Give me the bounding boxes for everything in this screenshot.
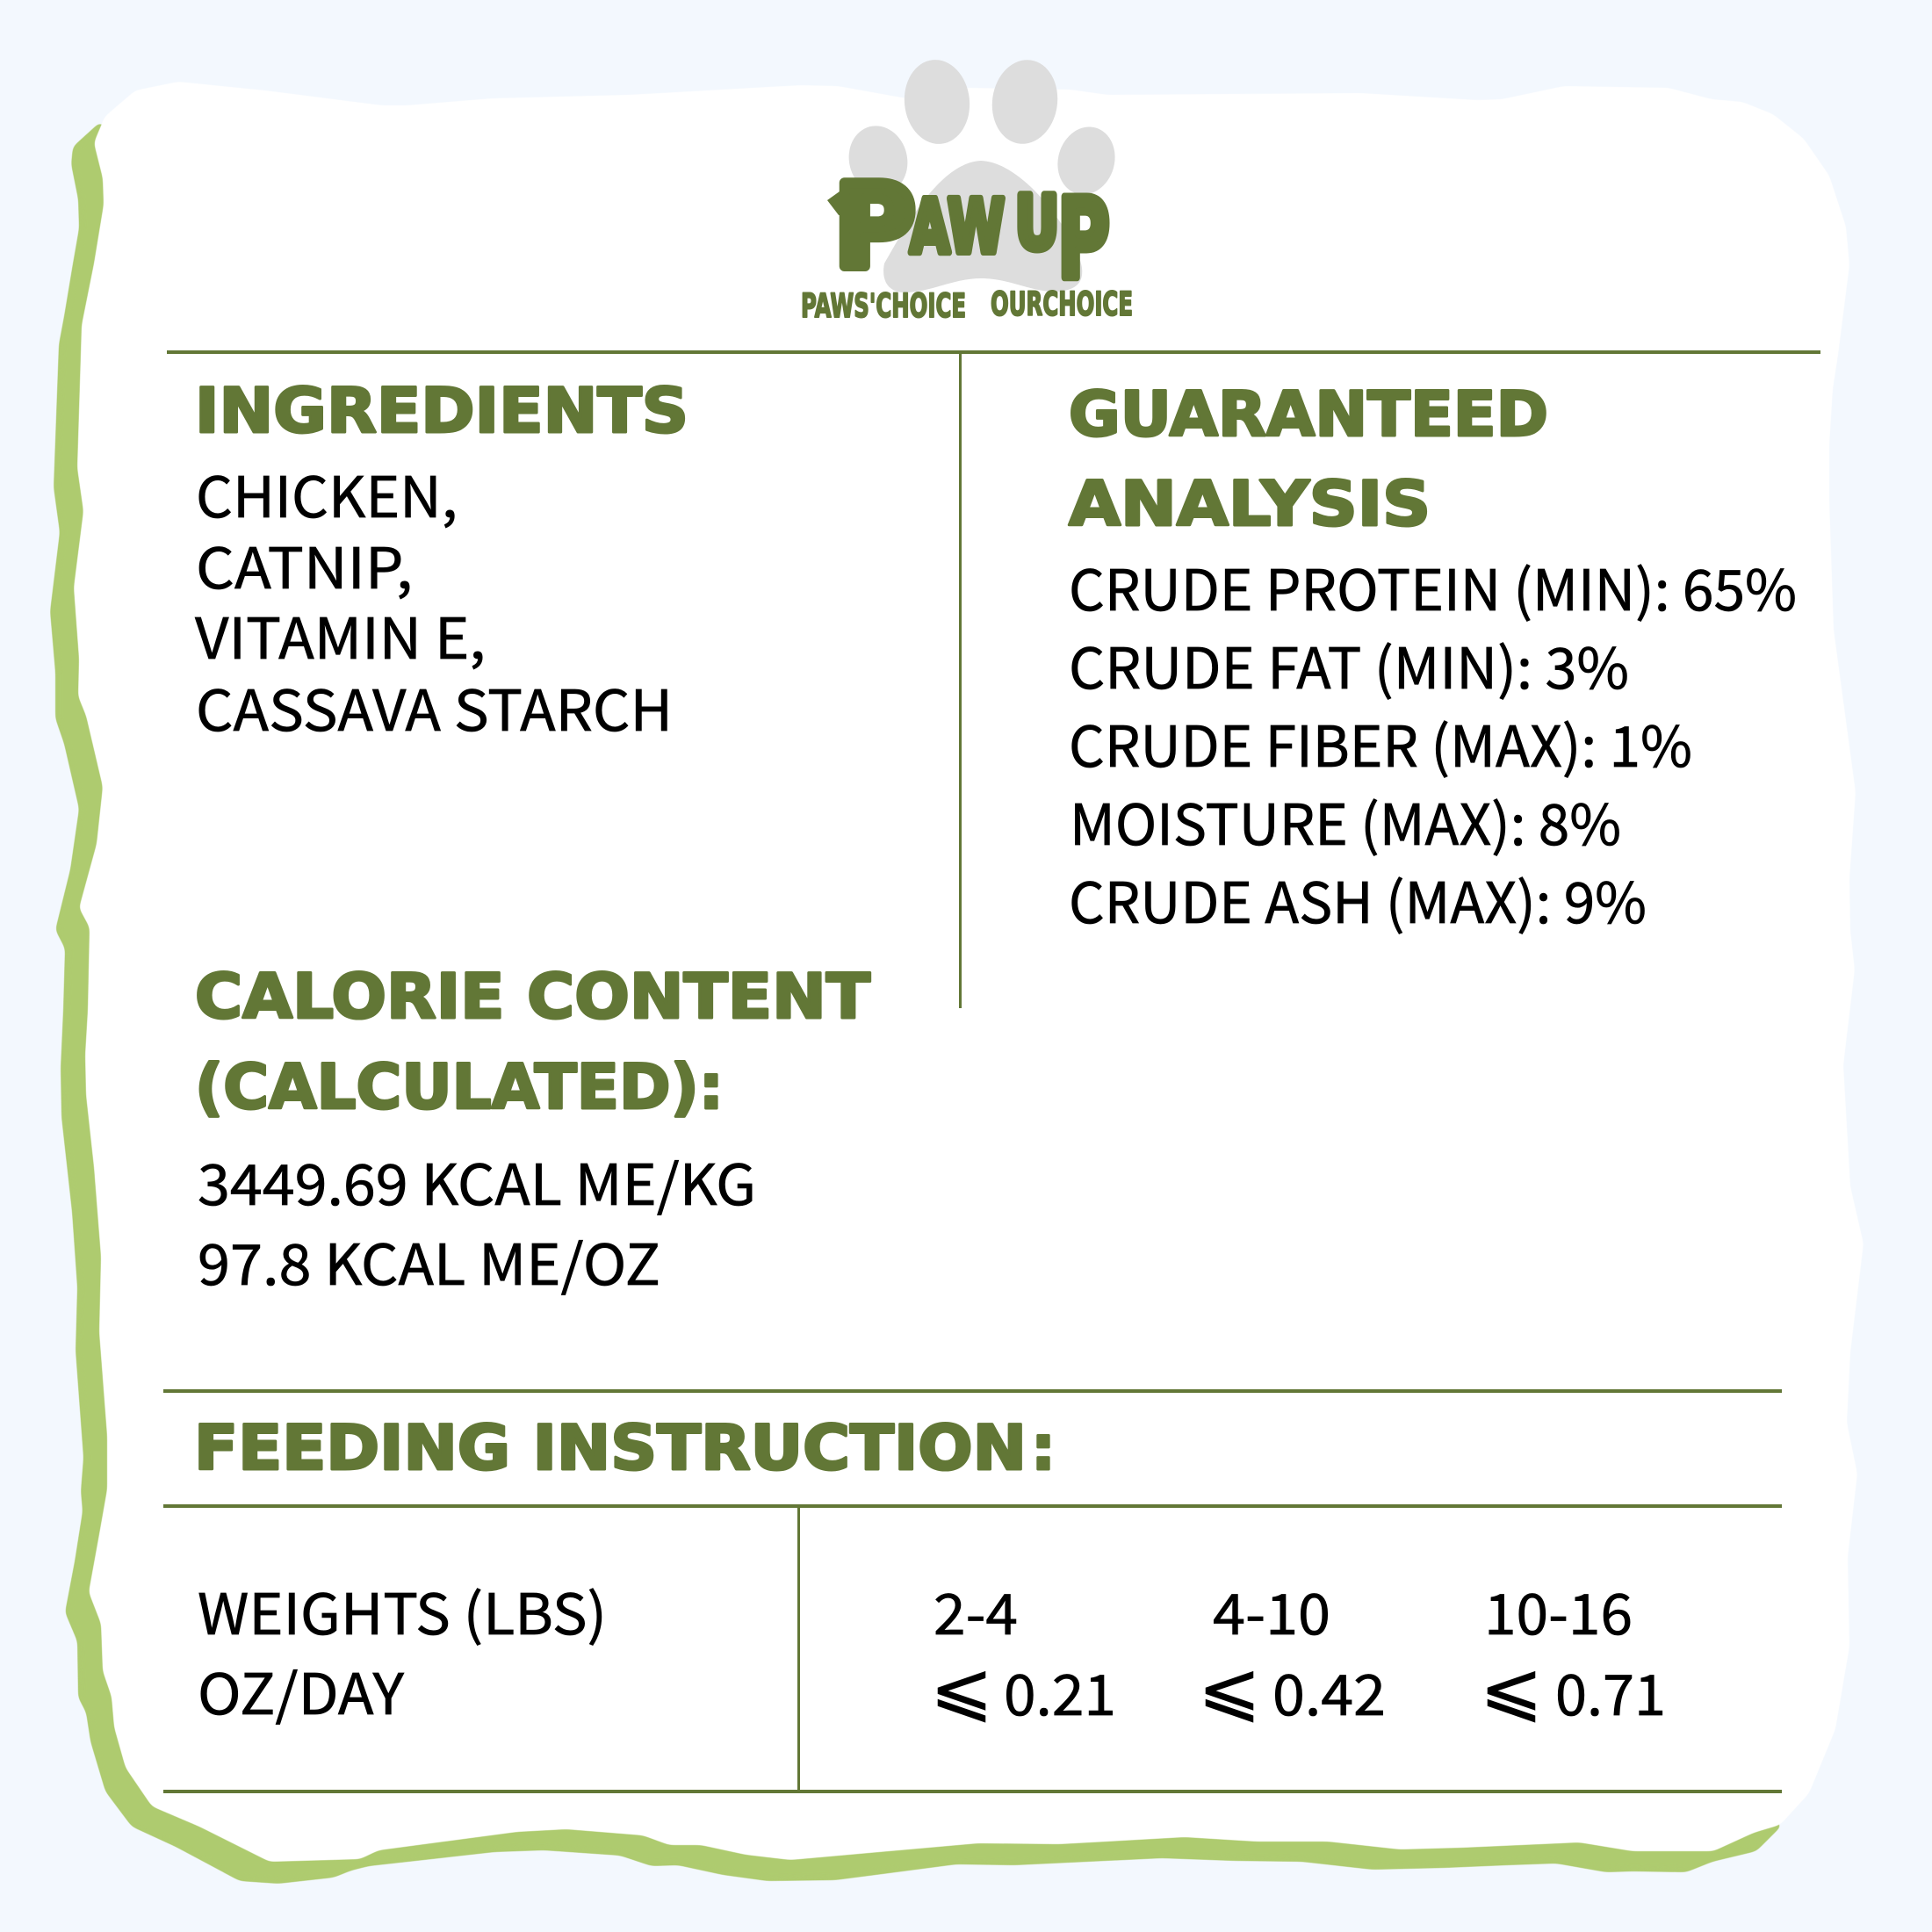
feeding table: row labels: OZ/DAY (198, 1650, 405, 1731)
calorie values (198, 1141, 756, 1301)
ingredients list: CHICKEN, (196, 453, 458, 534)
feeding table: weights and amounts (930, 1570, 1666, 1732)
logo tagline: OURCHOICE (991, 285, 1133, 323)
feeding table: weights and amounts: 10-16 (1484, 1570, 1633, 1651)
logo (801, 55, 1133, 325)
logo wordmark (827, 160, 1110, 304)
calorie values: 3449.69 KCAL ME/KG (198, 1141, 756, 1222)
guaranteed analysis list (1069, 546, 1797, 940)
calorie values: 97.8 KCAL ME/OZ (198, 1221, 660, 1301)
feeding table: weights and amounts: 4-10 (1213, 1570, 1330, 1651)
icon: paw print (842, 55, 1123, 292)
heading: feeding instruction: FEEDING INSTRUCTION (194, 1412, 1027, 1484)
ingredients list: CATNIP, (196, 524, 413, 605)
guaranteed analysis list: MOISTURE (MAX): 8% (1070, 781, 1621, 861)
feeding table: weights and amounts: 0.42 (1272, 1651, 1386, 1732)
heading: calorie content (195, 961, 870, 1123)
feeding table: weights and amounts: ⩽ (1198, 1647, 1261, 1731)
heading: feeding instruction: : (1031, 1412, 1056, 1484)
guaranteed analysis list: CRUDE ASH (MAX): 9% (1069, 859, 1647, 940)
feeding table: weights and amounts: 0.21 (1004, 1651, 1116, 1732)
heading: guaranteed analysis (1069, 378, 1548, 540)
heading: calorie content: (CALCULATED): (195, 1051, 724, 1123)
logo wordmark: P (1057, 175, 1110, 304)
ingredients list: VITAMIN E, (195, 595, 486, 675)
feeding table: row labels: WEIGHTS (LBS) (198, 1570, 607, 1651)
feeding table: weights and amounts: ⩽ (1480, 1647, 1543, 1731)
logo tagline: PAWS'CHOICE (801, 287, 966, 325)
logo wordmark: P (834, 160, 915, 293)
guaranteed analysis list: CRUDE FIBER (MAX): 1% (1069, 703, 1692, 783)
guaranteed analysis list: CRUDE FAT (MIN): 3% (1069, 624, 1629, 705)
heading: ingredients: INGREDIENTS (195, 375, 688, 447)
ingredients list: CASSAVA STARCH (196, 667, 673, 747)
feeding table: weights and amounts: 0.71 (1555, 1651, 1666, 1732)
logo wordmark: U (1015, 180, 1059, 266)
feeding table: row labels (198, 1570, 607, 1731)
logo wordmark: AW (910, 184, 1005, 270)
heading: guaranteed analysis: ANALYSIS (1069, 468, 1431, 540)
heading: calorie content: CALORIE CONTENT (195, 961, 870, 1033)
heading: guaranteed analysis: GUARANTEED (1069, 378, 1548, 451)
ingredients list (195, 453, 673, 747)
feeding table: weights and amounts: ⩽ (930, 1647, 993, 1731)
guaranteed analysis list: CRUDE PROTEIN (MIN): 65% (1069, 546, 1797, 627)
feeding table: weights and amounts: 2-4 (934, 1570, 1018, 1651)
